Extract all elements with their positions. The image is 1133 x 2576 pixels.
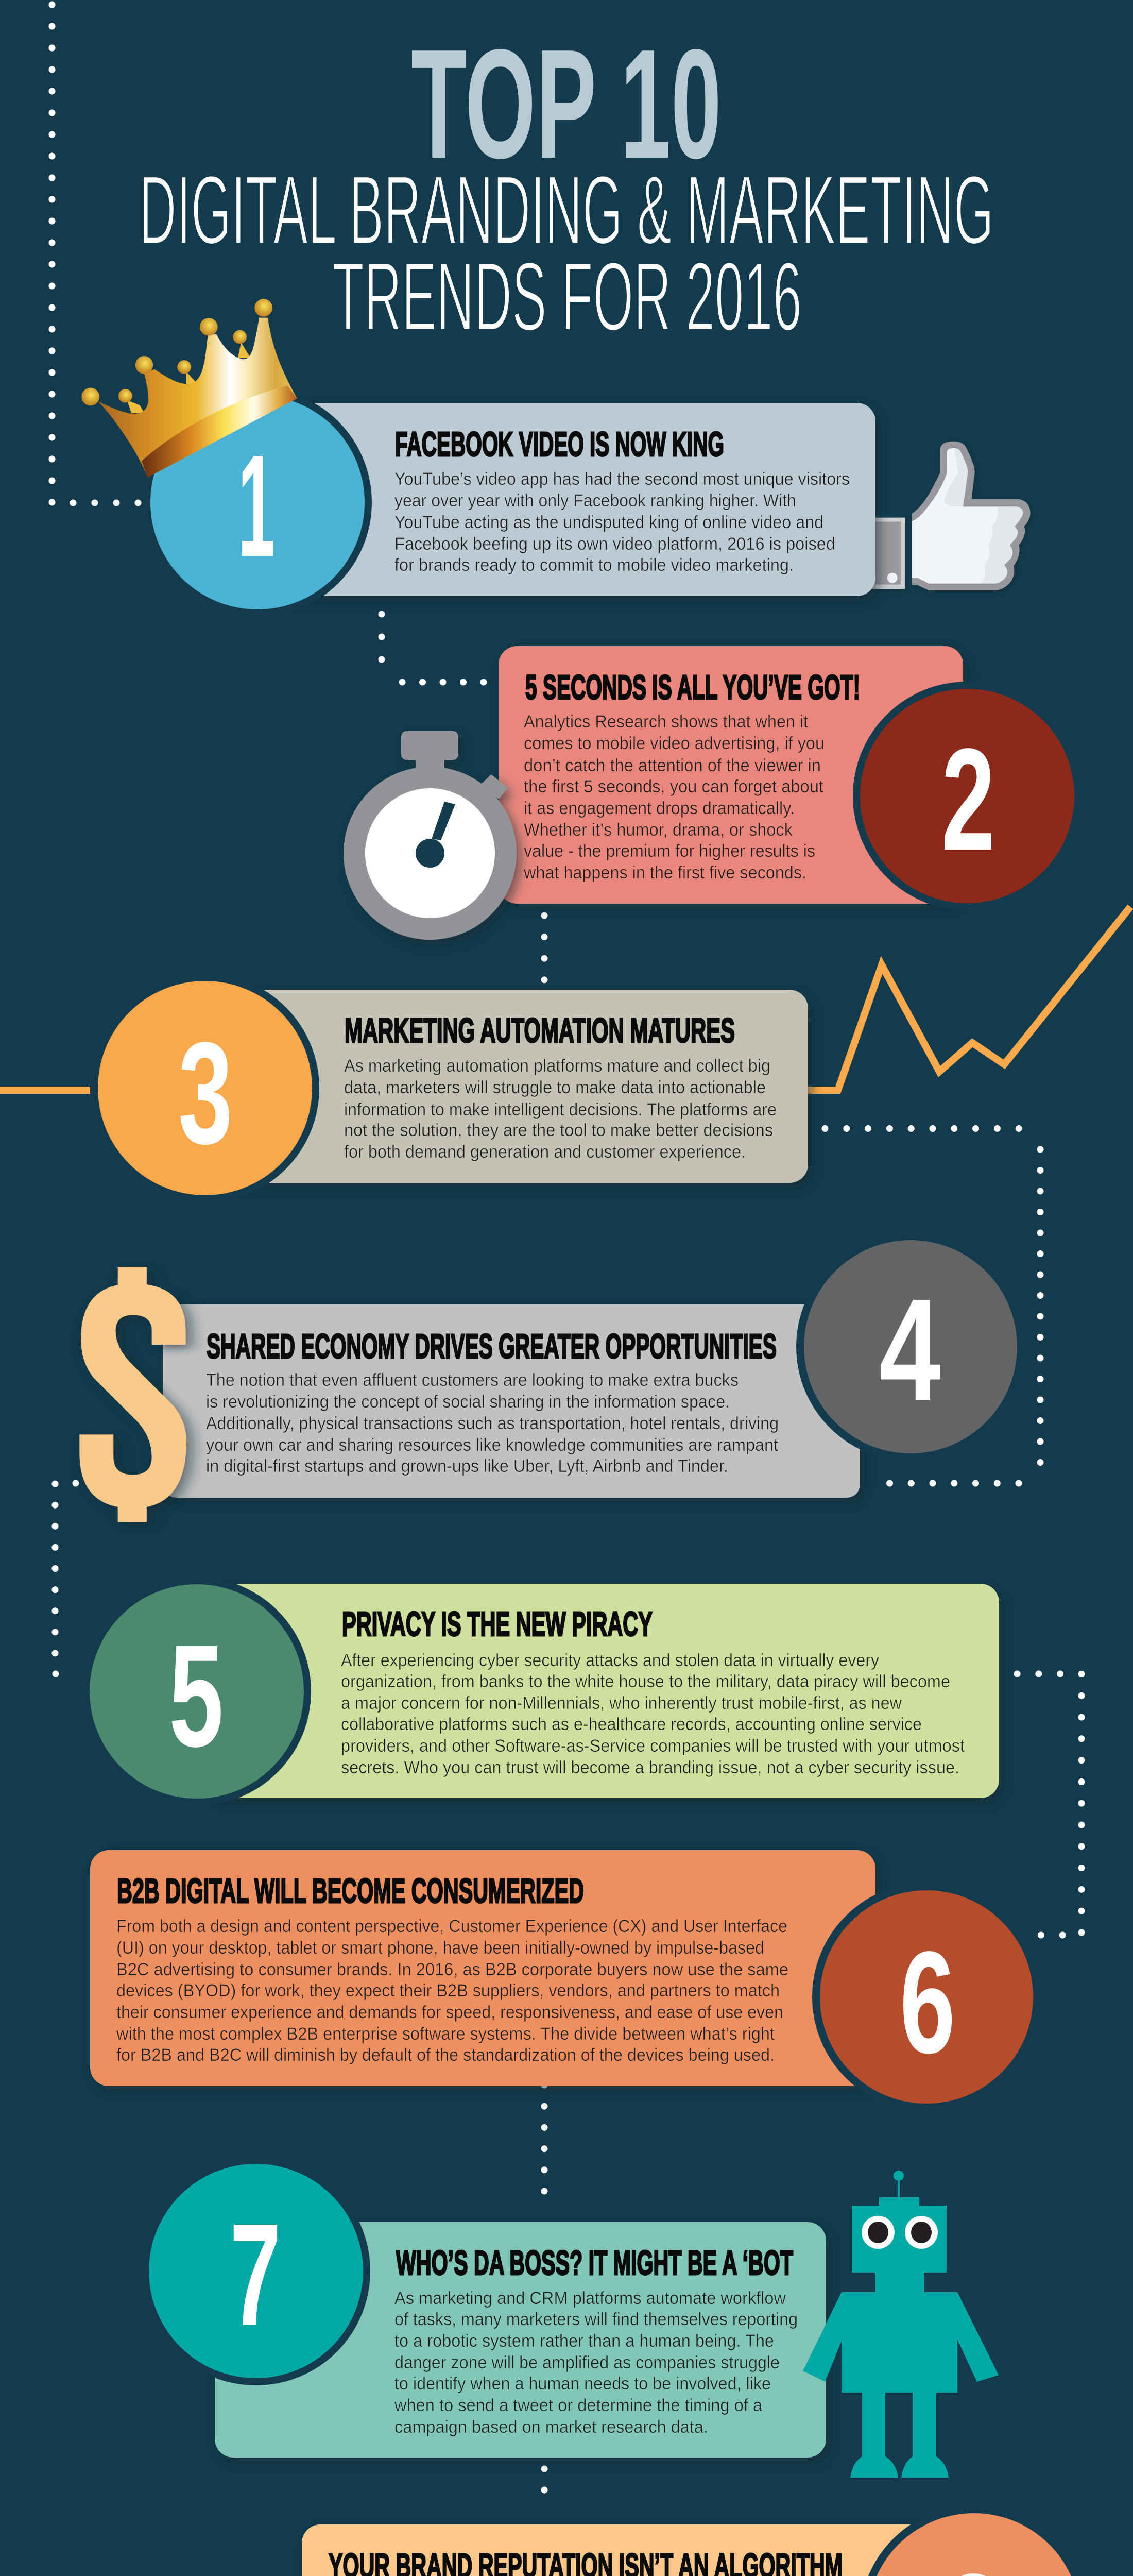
panel: trend 4 (79, 1232, 1025, 1522)
panel: trend 1 (81, 299, 1031, 617)
body text: don’t catch the attention of the viewer in (524, 756, 821, 775)
chart: orange trend line (0, 907, 1130, 1090)
number circle 6 (812, 1883, 1041, 2111)
icon: thumbs up (869, 442, 1031, 590)
body text: their consumer experience and demands for speed, responsiveness, and ease of use even (116, 2003, 783, 2022)
body text: data, marketers will struggle to make data into actionable (344, 1078, 766, 1097)
number circle 8 (860, 2505, 1088, 2576)
body text: a major concern for non-Millennials, who inherently trust mobile-first, as new (341, 1693, 902, 1713)
heading: B2B DIGITAL WILL BECOME CONSUMERIZED (117, 1872, 584, 1910)
title: TOP 10 (411, 17, 722, 191)
body text: the first 5 seconds, you can forget about (524, 777, 824, 796)
number circle 7 (142, 2157, 370, 2385)
body text: in digital-first startups and grown-ups like Uber, Lyft, Airbnb and Tinder. (206, 1456, 728, 1476)
body text (116, 1917, 788, 2065)
body text: not the solution, they are the tool to make better decisions (344, 1121, 773, 1140)
body text: value - the premium for higher results is (524, 841, 815, 861)
card (90, 1850, 876, 2086)
body text: (UI) on your desktop, tablet or smart phone, have been initially-owned by impulse-based (116, 1938, 764, 1958)
panel: trend 5 (82, 1577, 999, 1806)
icon: crown (81, 299, 297, 478)
heading: FACEBOOK VIDEO IS NOW KING (395, 425, 724, 464)
body text: Facebook beefing up its own video platform, 2016 is poised (394, 534, 835, 554)
card (247, 403, 876, 596)
body text: it as engagement drops dramatically. (524, 799, 795, 818)
heading: 5 SECONDS IS ALL YOU’VE GOT! (525, 668, 860, 707)
body text: Whether it’s humor, drama, or shock (524, 820, 793, 840)
icon: dollar sign (79, 1267, 186, 1522)
number circle 1: 1 (238, 425, 275, 587)
card (163, 1304, 860, 1498)
body text: secrets. Who you can trust will become a branding issue, not a cyber security issue. (341, 1758, 959, 1777)
heading: PRIVACY IS THE NEW PIRACY (342, 1605, 653, 1643)
title (139, 17, 994, 351)
number circle 7: 7 (230, 2193, 281, 2355)
body text: for B2B and B2C will diminish by default of the standardization of the devices being used. (116, 2045, 775, 2065)
body text (523, 712, 825, 883)
number circle 1 (143, 388, 372, 617)
number circle 2 (853, 682, 1082, 910)
body text: for both demand generation and customer experience. (344, 1142, 746, 1162)
body text: As marketing and CRM platforms automate workflow (394, 2289, 786, 2308)
number circle 2: 2 (941, 718, 995, 880)
heading: MARKETING AUTOMATION MATURES (345, 1011, 735, 1050)
body text: campaign based on market research data. (394, 2417, 708, 2437)
icon: stopwatch (344, 731, 517, 940)
heading: WHO’S DA BOSS? IT MIGHT BE A ‘BOT (396, 2244, 793, 2282)
body text: devices (BYOD) for work, they expect their B2B suppliers, vendors, and partners to match (116, 1981, 780, 2001)
body text: with the most complex B2B enterprise software systems. The divide between what’s right (116, 2024, 775, 2044)
card (302, 2524, 946, 2576)
body text: Analytics Research shows that when it (524, 712, 809, 732)
body text: for brands ready to commit to mobile video marketing. (394, 555, 794, 575)
heading: SHARED ECONOMY DRIVES GREATER OPPORTUNITIES (207, 1327, 777, 1366)
body text: YouTube acting as the undisputed king of online video and (394, 513, 823, 532)
body text: From both a design and content perspective, Customer Experience (CX) and User Interface (116, 1917, 787, 1936)
body text: when to send a tweet or determine the timing of a (394, 2396, 762, 2415)
body text (394, 2289, 798, 2437)
body text: to a robotic system rather than a human being. The (394, 2331, 774, 2351)
panel: trend 3 (91, 974, 808, 1202)
number circle 4 (796, 1232, 1025, 1461)
card (215, 2222, 826, 2458)
body text: danger zone will be amplified as companies struggle (394, 2353, 780, 2372)
card (499, 646, 963, 904)
number circle 3: 3 (178, 1012, 233, 1174)
body text: providers, and other Software-as-Service companies will be trusted with your utmost (341, 1736, 965, 1756)
card (206, 990, 808, 1183)
body text: As marketing automation platforms mature and collect big (344, 1056, 770, 1076)
panel: trend 6 (90, 1850, 1041, 2111)
panel: trend 2 (344, 646, 1082, 940)
body text: is revolutionizing the concept of social sharing in the information space. (206, 1392, 730, 1412)
number circle 3 (91, 974, 319, 1202)
number circle 6: 6 (900, 1921, 955, 2083)
body text: comes to mobile video advertising, if you (524, 734, 825, 753)
body text: The notion that even affluent customers are looking to make extra bucks (206, 1370, 739, 1390)
body text: Additionally, physical transactions such as transportation, hotel rentals, driving (206, 1414, 779, 1433)
panel: trend 7 (142, 2157, 999, 2478)
body text: information to make intelligent decisions. The platforms are (344, 1100, 777, 1120)
body text: organization, from banks to the white house to the military, data piracy will become (341, 1672, 950, 1691)
body text: After experiencing cyber security attacks and stolen data in virtually every (341, 1651, 879, 1670)
body text (344, 1056, 777, 1162)
body text: year over year with only Facebook ranking higher. With (394, 491, 796, 511)
number circle 4: 4 (879, 1268, 941, 1431)
number circle 5: 5 (169, 1615, 224, 1777)
icon: robot (803, 2171, 999, 2478)
body text: collaborative platforms such as e-healthcare records, accounting online service (341, 1715, 922, 1734)
panel: trend 8 (302, 2505, 1088, 2576)
body text: YouTube’s video app has had the second most unique visitors (394, 469, 850, 489)
card (206, 1584, 999, 1798)
body text: of tasks, many marketers will find themselves reporting (394, 2310, 798, 2329)
body text (394, 469, 850, 575)
body text: B2C advertising to consumer brands. In 2016, as B2B corporate buyers now use the same (116, 1960, 788, 1979)
body text: to identify when a human needs to be involved, like (394, 2374, 771, 2394)
number circle 5 (82, 1577, 311, 1806)
body text: your own car and sharing resources like knowledge communities are rampant (206, 1435, 779, 1455)
body text (206, 1370, 779, 1476)
body text (341, 1651, 965, 1777)
body text: what happens in the first five seconds. (523, 863, 806, 883)
